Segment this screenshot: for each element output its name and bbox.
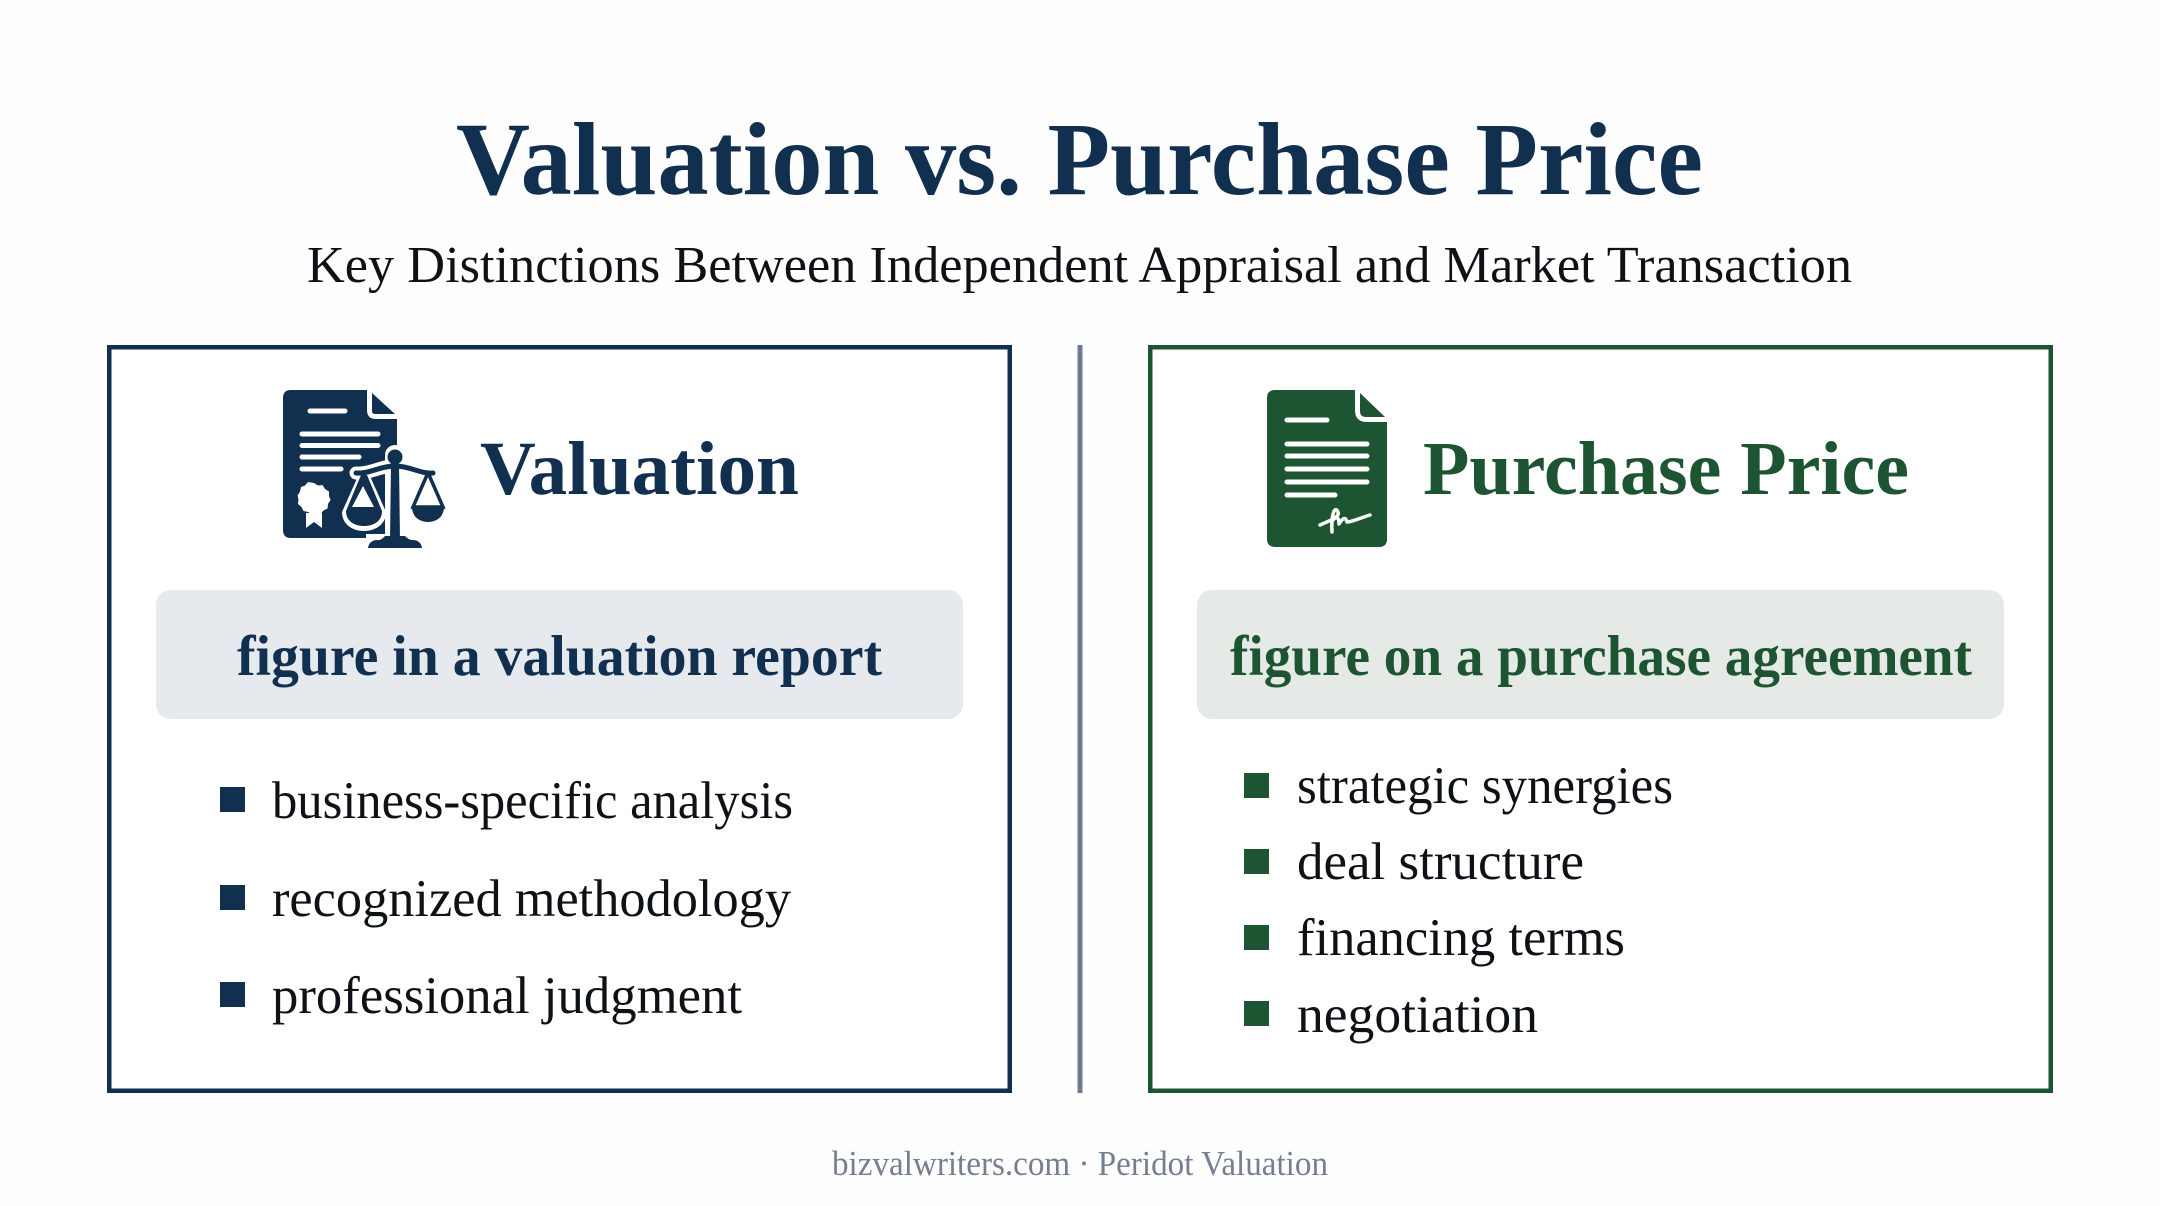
list: valuation factors: business-specific analysis [272, 772, 793, 830]
icon: signed agreement document [1267, 390, 1387, 547]
badge: figure in a valuation report [156, 590, 963, 719]
list: purchase price factors: deal structure [1297, 833, 1584, 891]
panel: purchase price [1150, 347, 2051, 1091]
heading: valuation: Valuation [480, 427, 799, 511]
title: Valuation vs. Purchase Price [456, 102, 1703, 217]
list: purchase price factors [1244, 757, 1673, 1044]
icon: document with scales of justice [283, 390, 444, 552]
badge: figure on a purchase agreement: figure on a purchase agreement [1230, 625, 1972, 688]
footer: bizvalwriters.com · Peridot Valuation [832, 1144, 1328, 1183]
badge: figure on a purchase agreement [1197, 590, 2004, 719]
list: valuation factors: professional judgment [272, 967, 742, 1025]
icon: scales [342, 450, 444, 552]
list: purchase price factors: negotiation [1297, 986, 1538, 1044]
heading: purchase price: Purchase Price [1423, 427, 1909, 511]
list: valuation factors [220, 772, 793, 1025]
list: purchase price factors: strategic synergies [1297, 757, 1673, 815]
subtitle: Key Distinctions Between Independent Appraisal and Market Transaction [307, 237, 1852, 294]
list: purchase price factors: financing terms [1297, 909, 1625, 967]
list: valuation factors: recognized methodology [272, 870, 791, 928]
center divider [1078, 345, 1082, 1093]
badge: figure in a valuation report: figure in a valuation report [237, 625, 882, 688]
panel: valuation [109, 347, 1010, 1091]
